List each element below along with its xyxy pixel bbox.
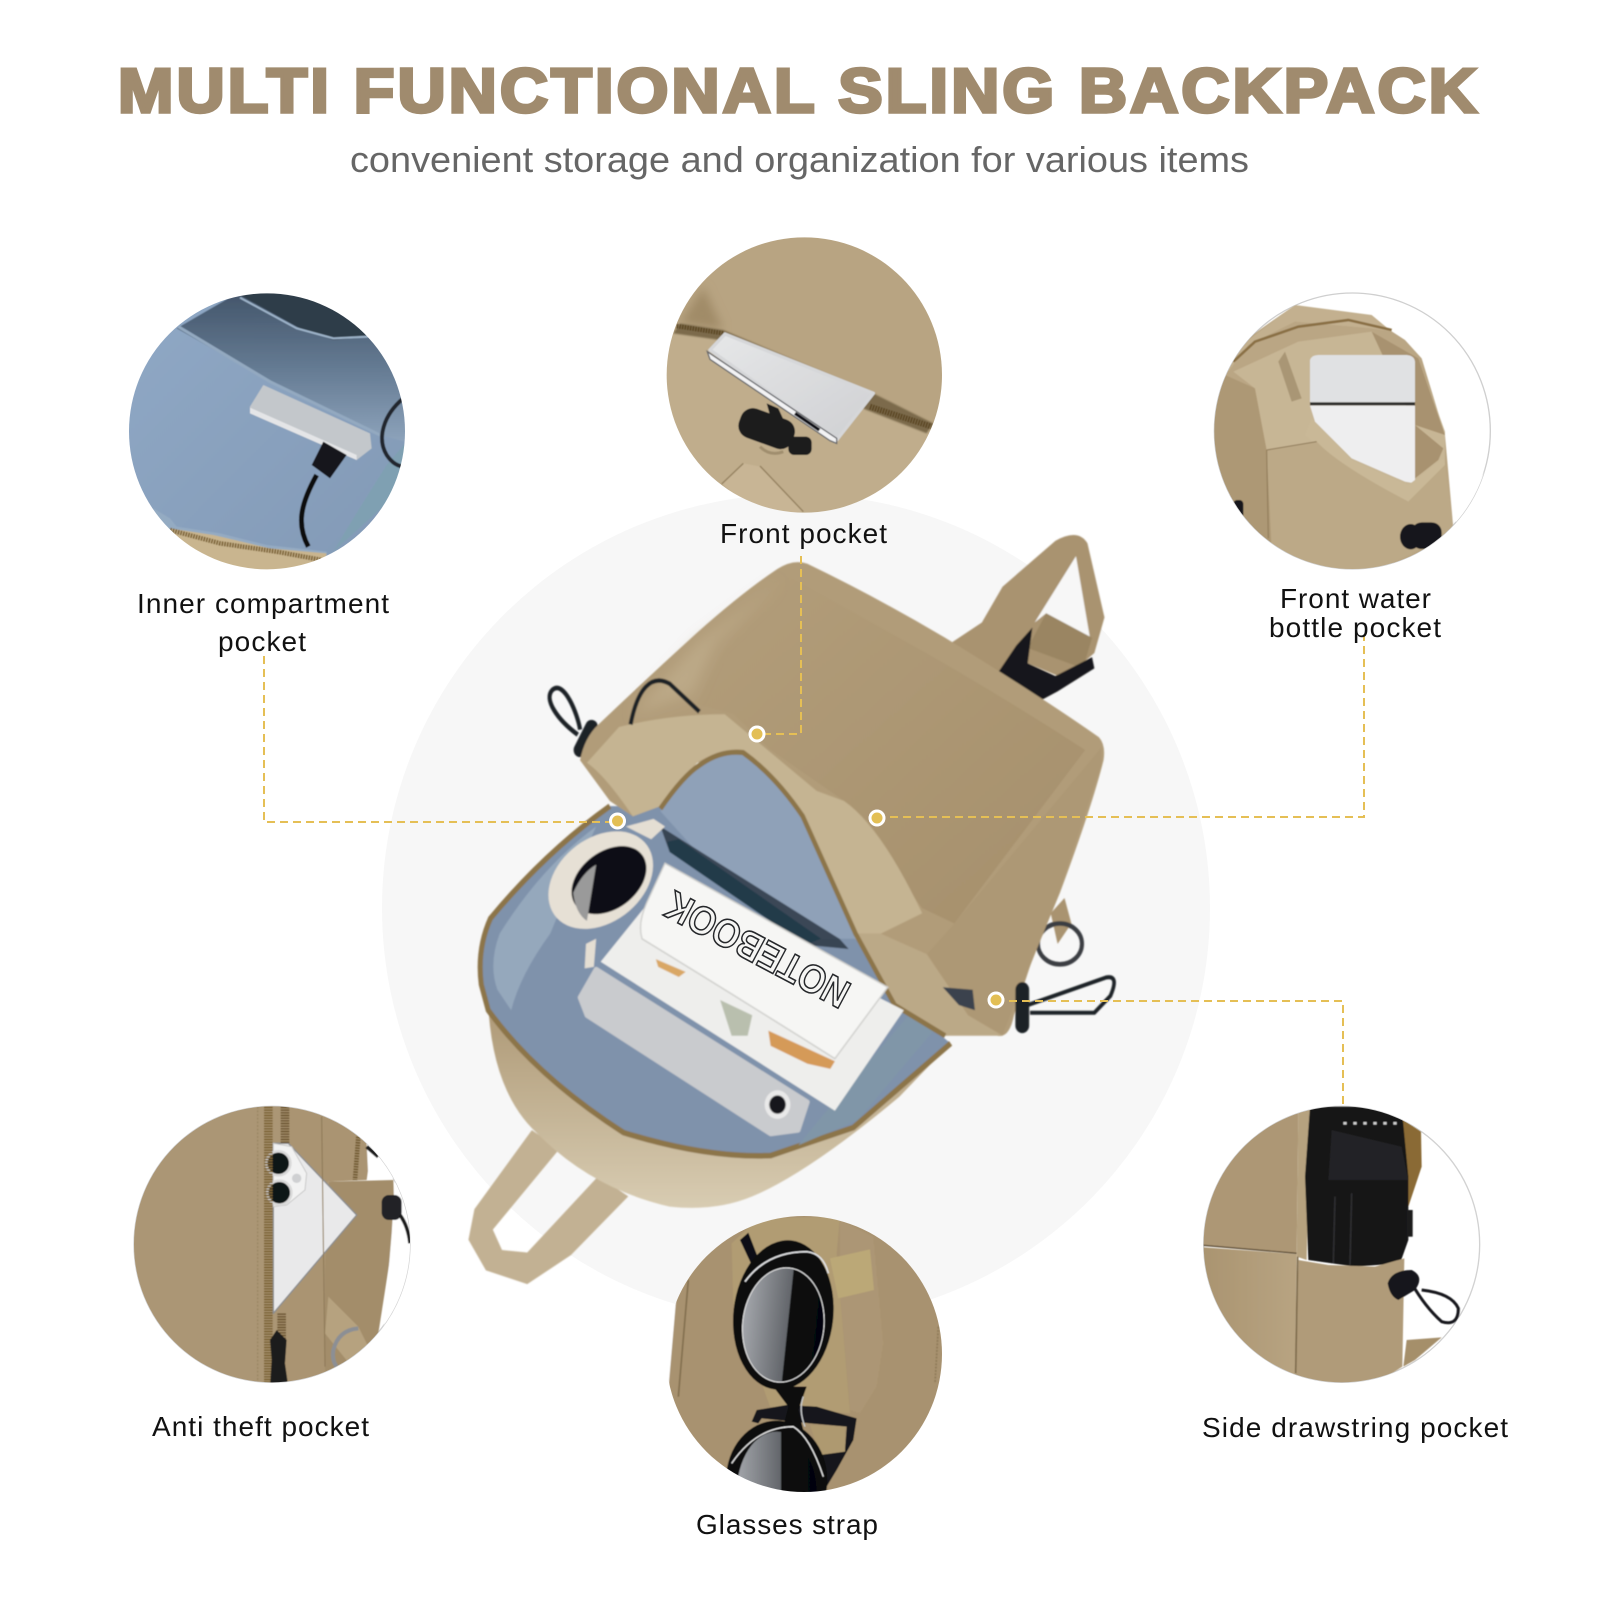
callout dots (610, 727, 1003, 1007)
pocket panel (840, 1220, 883, 1413)
front face panel (697, 577, 1085, 923)
right side seam (935, 1327, 938, 1383)
title: MULTI FUNCTIONAL SLING BACKPACK (118, 57, 1480, 126)
pocket front (1314, 442, 1374, 483)
callout line: front water bottle pocket (877, 635, 1364, 817)
bridge (773, 1387, 807, 1430)
upper lens frame (726, 1235, 841, 1395)
toggle and loop cord (1388, 1270, 1458, 1323)
subtitle: convenient storage and organization for various items (350, 139, 1249, 180)
label: inner compartment pocket (137, 588, 389, 657)
pocket right opening shadow (1415, 425, 1443, 478)
teal card (667, 839, 821, 945)
lower left panel (1195, 1247, 1297, 1393)
rolled zipper lip (587, 714, 922, 934)
circle: anti theft pocket (133, 1106, 411, 1383)
thermos bottle (1310, 355, 1415, 483)
charger clip (735, 403, 812, 455)
phone (273, 1143, 357, 1313)
circle: glasses strap (668, 1216, 942, 1492)
upper pocket lining (660, 752, 856, 939)
label: inner compartment pocket: Inner compartment (137, 588, 389, 619)
buckle (752, 1405, 857, 1487)
label: glasses strap: Glasses strap (696, 1509, 878, 1540)
drawstring toggle (1400, 522, 1442, 549)
left panel (134, 1106, 286, 1382)
mesh back (1398, 1117, 1422, 1207)
notebook cover (641, 863, 888, 1059)
lower pocket (1295, 1258, 1404, 1393)
central backpack photo (468, 535, 1114, 1284)
top left highlight (633, 582, 780, 714)
background circle (382, 494, 1210, 1322)
dark left fold (682, 290, 722, 328)
label: front water bottle pocket (1269, 583, 1441, 643)
strip zip on rear (355, 1137, 358, 1180)
label: anti theft pocket: Anti theft pocket (152, 1411, 369, 1442)
top carry handle and buckle (947, 535, 1104, 700)
lining edge (154, 510, 326, 553)
callout line: side drawstring pocket (996, 1001, 1343, 1107)
zipper pull (270, 1330, 288, 1387)
pocket lip (1319, 444, 1416, 498)
silver tablet (580, 969, 807, 1134)
circle: inner compartment (129, 293, 405, 570)
top zip band (1228, 305, 1392, 372)
zipper rim lower (480, 806, 951, 1156)
power bank (250, 385, 372, 460)
callout line: inner compartment pocket (264, 656, 617, 822)
drawstring cord right (1022, 977, 1114, 1026)
elastic strap (830, 1249, 874, 1298)
side D-ring and strap (1038, 898, 1082, 964)
usb cable (312, 442, 347, 478)
zipper teeth (677, 326, 723, 333)
right side panel (927, 747, 1101, 1035)
right panels (284, 1107, 368, 1382)
right inner lining (798, 1008, 934, 1145)
label: inner compartment pocket: pocket (218, 626, 306, 657)
cord toggle (382, 1195, 410, 1243)
black umbrella (1305, 1107, 1413, 1267)
inner lining ruffle (493, 827, 596, 1010)
label: front water bottle pocket: bottle pocket (1269, 612, 1441, 643)
label: front water bottle pocket: Front water (1280, 583, 1431, 614)
white book (601, 888, 904, 1111)
drawstring loop left (550, 688, 592, 750)
upper left panel (1195, 1100, 1298, 1253)
circle: front water bottle pocket (1205, 293, 1498, 578)
bag silhouette (1226, 308, 1454, 564)
seam strip (1297, 1107, 1310, 1260)
main compartment interior (480, 806, 951, 1156)
bag base shell (488, 1005, 951, 1208)
notebook lettering: NOTEBOOK (658, 882, 857, 1016)
lip underside highlight (856, 934, 1003, 1036)
label: side drawstring pocket: Side drawstring pocket (1202, 1412, 1508, 1443)
metal ring (333, 1328, 358, 1367)
bag flap outer body (580, 562, 1104, 1036)
connector dark lining (943, 987, 975, 1010)
circle: side drawstring pocket (1195, 1100, 1480, 1393)
sunglass arm (740, 1233, 758, 1265)
upper zipper (660, 752, 945, 1036)
white cutout (366, 1144, 410, 1325)
left side panel (1214, 376, 1271, 542)
side toggle (1233, 500, 1243, 518)
lower panel (667, 334, 930, 512)
lower carry handle (468, 1130, 628, 1284)
left sliver (666, 1300, 677, 1385)
upper flap (176, 296, 404, 426)
white outside (1453, 452, 1498, 578)
side strap (1403, 1337, 1442, 1367)
pocket shadow (673, 323, 933, 433)
label: front pocket: Front pocket (720, 518, 887, 549)
power bank (710, 334, 873, 440)
lower right texture (333, 442, 407, 552)
drawstring cord top (631, 681, 699, 724)
callout line: front pocket (757, 556, 801, 734)
lower lens frame (726, 1421, 827, 1539)
white sunglasses (533, 811, 669, 968)
bag body (668, 1216, 942, 1490)
tan base and zipper (171, 528, 327, 570)
inner lining (1234, 332, 1446, 484)
circle: front pocket (666, 237, 942, 513)
main zipper (264, 1106, 274, 1382)
lower fold (724, 464, 800, 512)
vertical webbing (732, 1217, 850, 1413)
